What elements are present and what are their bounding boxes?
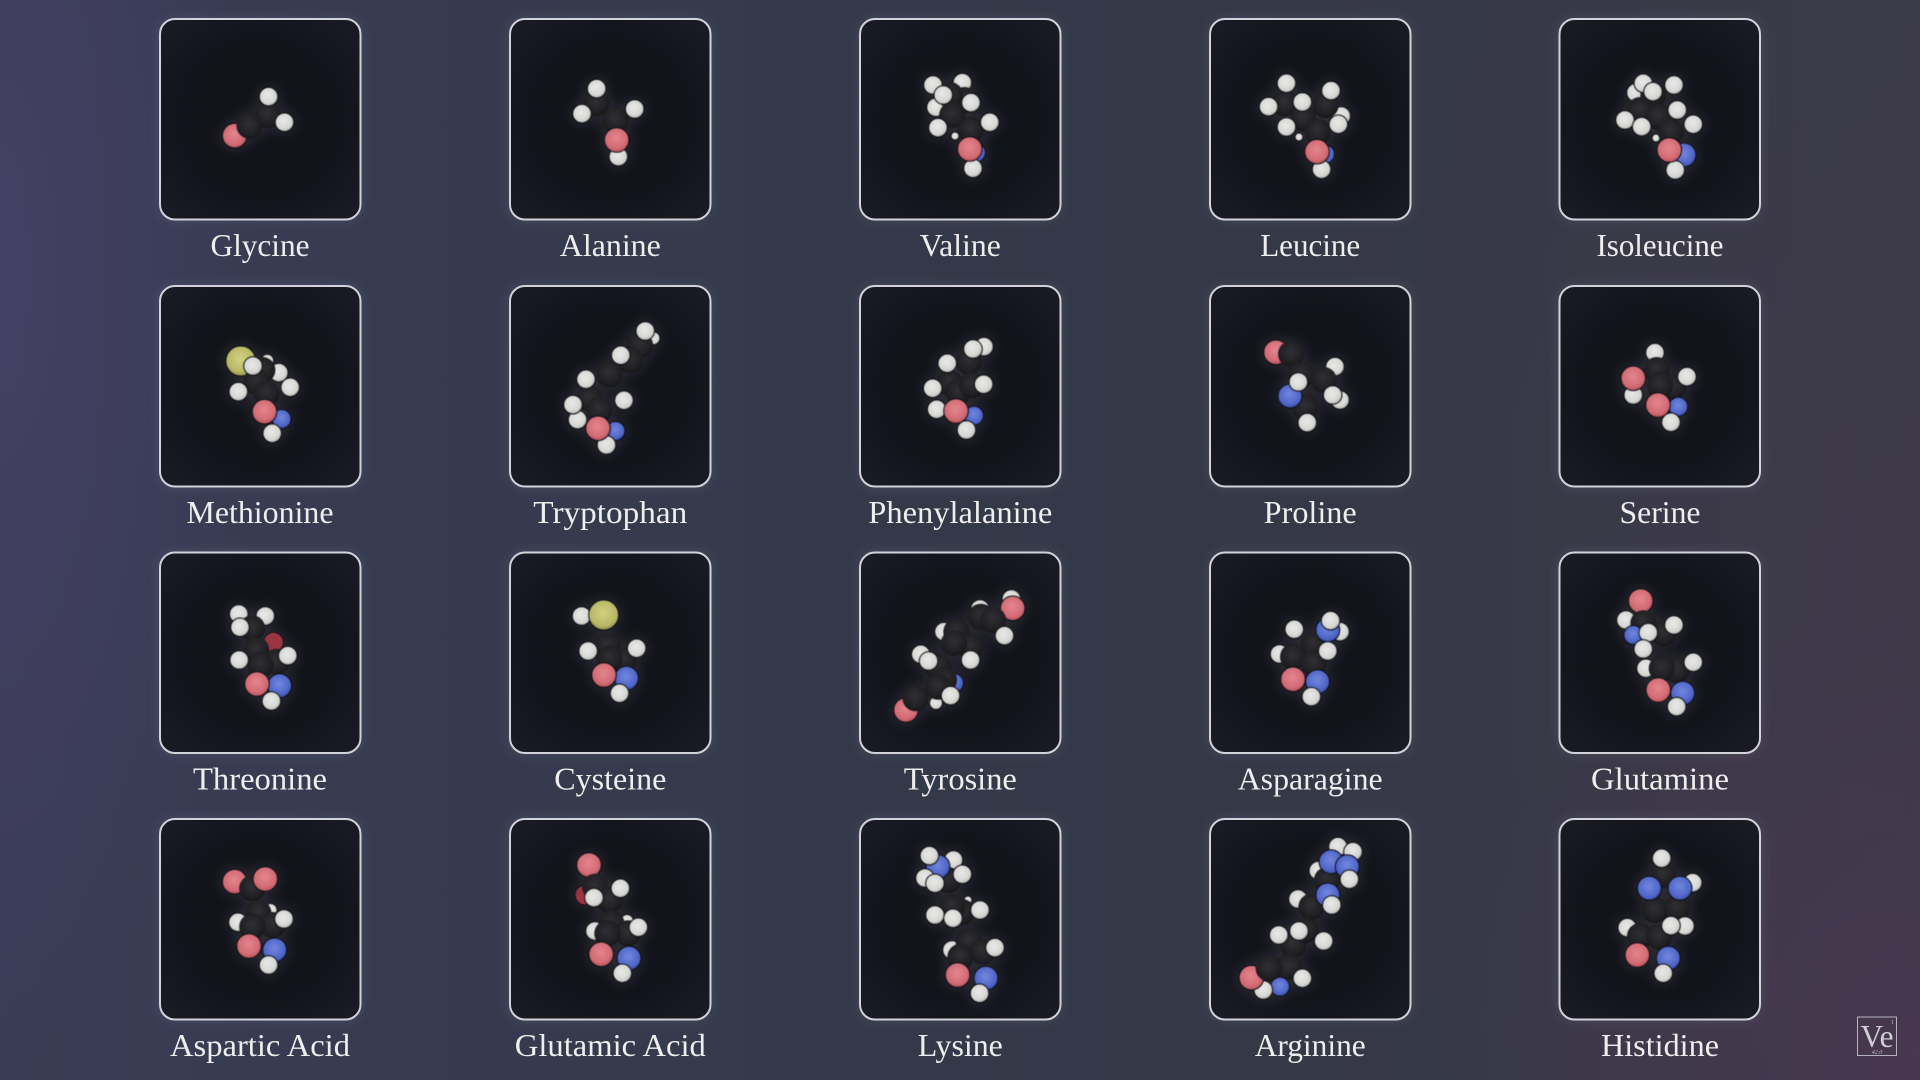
panel: Glutamic Acid	[510, 819, 710, 1063]
label: Methionine: Methionine	[186, 494, 334, 530]
molecule: Tryptophan	[564, 322, 660, 454]
card frame	[1560, 286, 1760, 486]
card frame	[860, 552, 1060, 753]
panel: Arginine	[1210, 819, 1410, 1063]
molecule: Arginine	[1239, 837, 1362, 999]
label: Glutamine: Glutamine	[1591, 760, 1729, 796]
card frame	[1210, 286, 1410, 486]
label: Histidine: Histidine	[1601, 1027, 1719, 1063]
card frame	[510, 19, 710, 220]
label: Lysine: Lysine	[918, 1027, 1003, 1063]
molecule: Histidine	[1618, 849, 1702, 983]
molecule: Cysteine	[572, 600, 646, 703]
card frame	[860, 19, 1060, 220]
panel: Valine	[860, 19, 1060, 263]
label: Glycine: Glycine	[210, 227, 310, 263]
molecule: Serine	[1621, 343, 1696, 432]
label: Alanine: Alanine	[560, 227, 661, 263]
card frame	[160, 819, 360, 1020]
card frame	[1560, 552, 1760, 753]
card frame	[860, 819, 1060, 1020]
panel: Threonine	[160, 552, 360, 796]
panel: Tryptophan	[510, 286, 710, 530]
label: Tryptophan: Tryptophan	[533, 494, 687, 530]
panel: Asparagine	[1210, 552, 1410, 796]
label: Asparagine: Asparagine	[1238, 760, 1383, 796]
card frame	[510, 819, 710, 1020]
logo: Ve element tile: Ve	[1860, 1018, 1894, 1054]
molecule: Glycine	[222, 87, 294, 148]
card frame	[1560, 19, 1760, 220]
card frame	[1560, 819, 1760, 1020]
panel: Lysine	[860, 819, 1060, 1063]
label: Tyrosine: Tyrosine	[904, 760, 1017, 796]
molecule: Leucine	[1259, 74, 1350, 179]
molecule: Tyrosine	[894, 590, 1025, 722]
molecule: Lysine	[916, 846, 1004, 1003]
card frame	[160, 19, 360, 220]
panel: Alanine	[510, 19, 710, 263]
label: Cysteine: Cysteine	[554, 760, 666, 796]
card frame	[1210, 19, 1410, 220]
label: Leucine: Leucine	[1260, 227, 1360, 263]
card frame	[1210, 552, 1410, 753]
molecule: Phenylalanine	[923, 337, 993, 439]
label: Serine: Serine	[1620, 494, 1700, 530]
panel: Glutamine	[1560, 552, 1760, 796]
label: Proline: Proline	[1264, 494, 1357, 530]
label: Aspartic Acid: Aspartic Acid	[170, 1027, 350, 1063]
card frame	[160, 286, 360, 486]
molecule: Threonine	[230, 605, 297, 710]
label: Glutamic Acid: Glutamic Acid	[515, 1027, 706, 1063]
molecule: Alanine	[573, 79, 644, 166]
panel: Proline	[1210, 286, 1410, 530]
panel: Methionine	[160, 286, 360, 530]
molecule: Aspartic Acid	[222, 867, 293, 974]
label: Phenylalanine: Phenylalanine	[868, 494, 1052, 530]
panel: Cysteine	[510, 552, 710, 796]
panel: Tyrosine	[860, 552, 1060, 796]
molecule: Proline	[1264, 340, 1349, 432]
label: Arginine: Arginine	[1255, 1027, 1366, 1063]
logo: Ve element tile: 42.0	[1872, 1049, 1882, 1056]
panel: Glycine	[160, 19, 360, 263]
molecule: Methionine	[226, 346, 300, 443]
panel: Aspartic Acid	[160, 819, 360, 1063]
molecule: Asparagine	[1270, 611, 1349, 706]
label: Threonine: Threonine	[193, 760, 327, 796]
card frame	[160, 552, 360, 753]
card frame	[860, 286, 1060, 486]
panel: Serine	[1560, 286, 1760, 530]
molecule: Isoleucine	[1616, 74, 1703, 179]
panel: Leucine	[1210, 19, 1410, 263]
card frame	[1210, 819, 1410, 1020]
panel: Isoleucine	[1560, 19, 1760, 263]
card frame	[510, 286, 710, 486]
logo: Ve element tile: 1	[1891, 1020, 1894, 1026]
panel: Phenylalanine	[860, 286, 1060, 530]
label: Valine: Valine	[920, 227, 1001, 263]
molecule: Glutamic Acid	[575, 853, 648, 983]
molecule: Valine	[924, 73, 999, 178]
panel: Histidine	[1560, 819, 1760, 1063]
label: Isoleucine: Isoleucine	[1596, 227, 1724, 263]
molecule: Glutamine	[1617, 589, 1703, 716]
card frame	[510, 552, 710, 753]
